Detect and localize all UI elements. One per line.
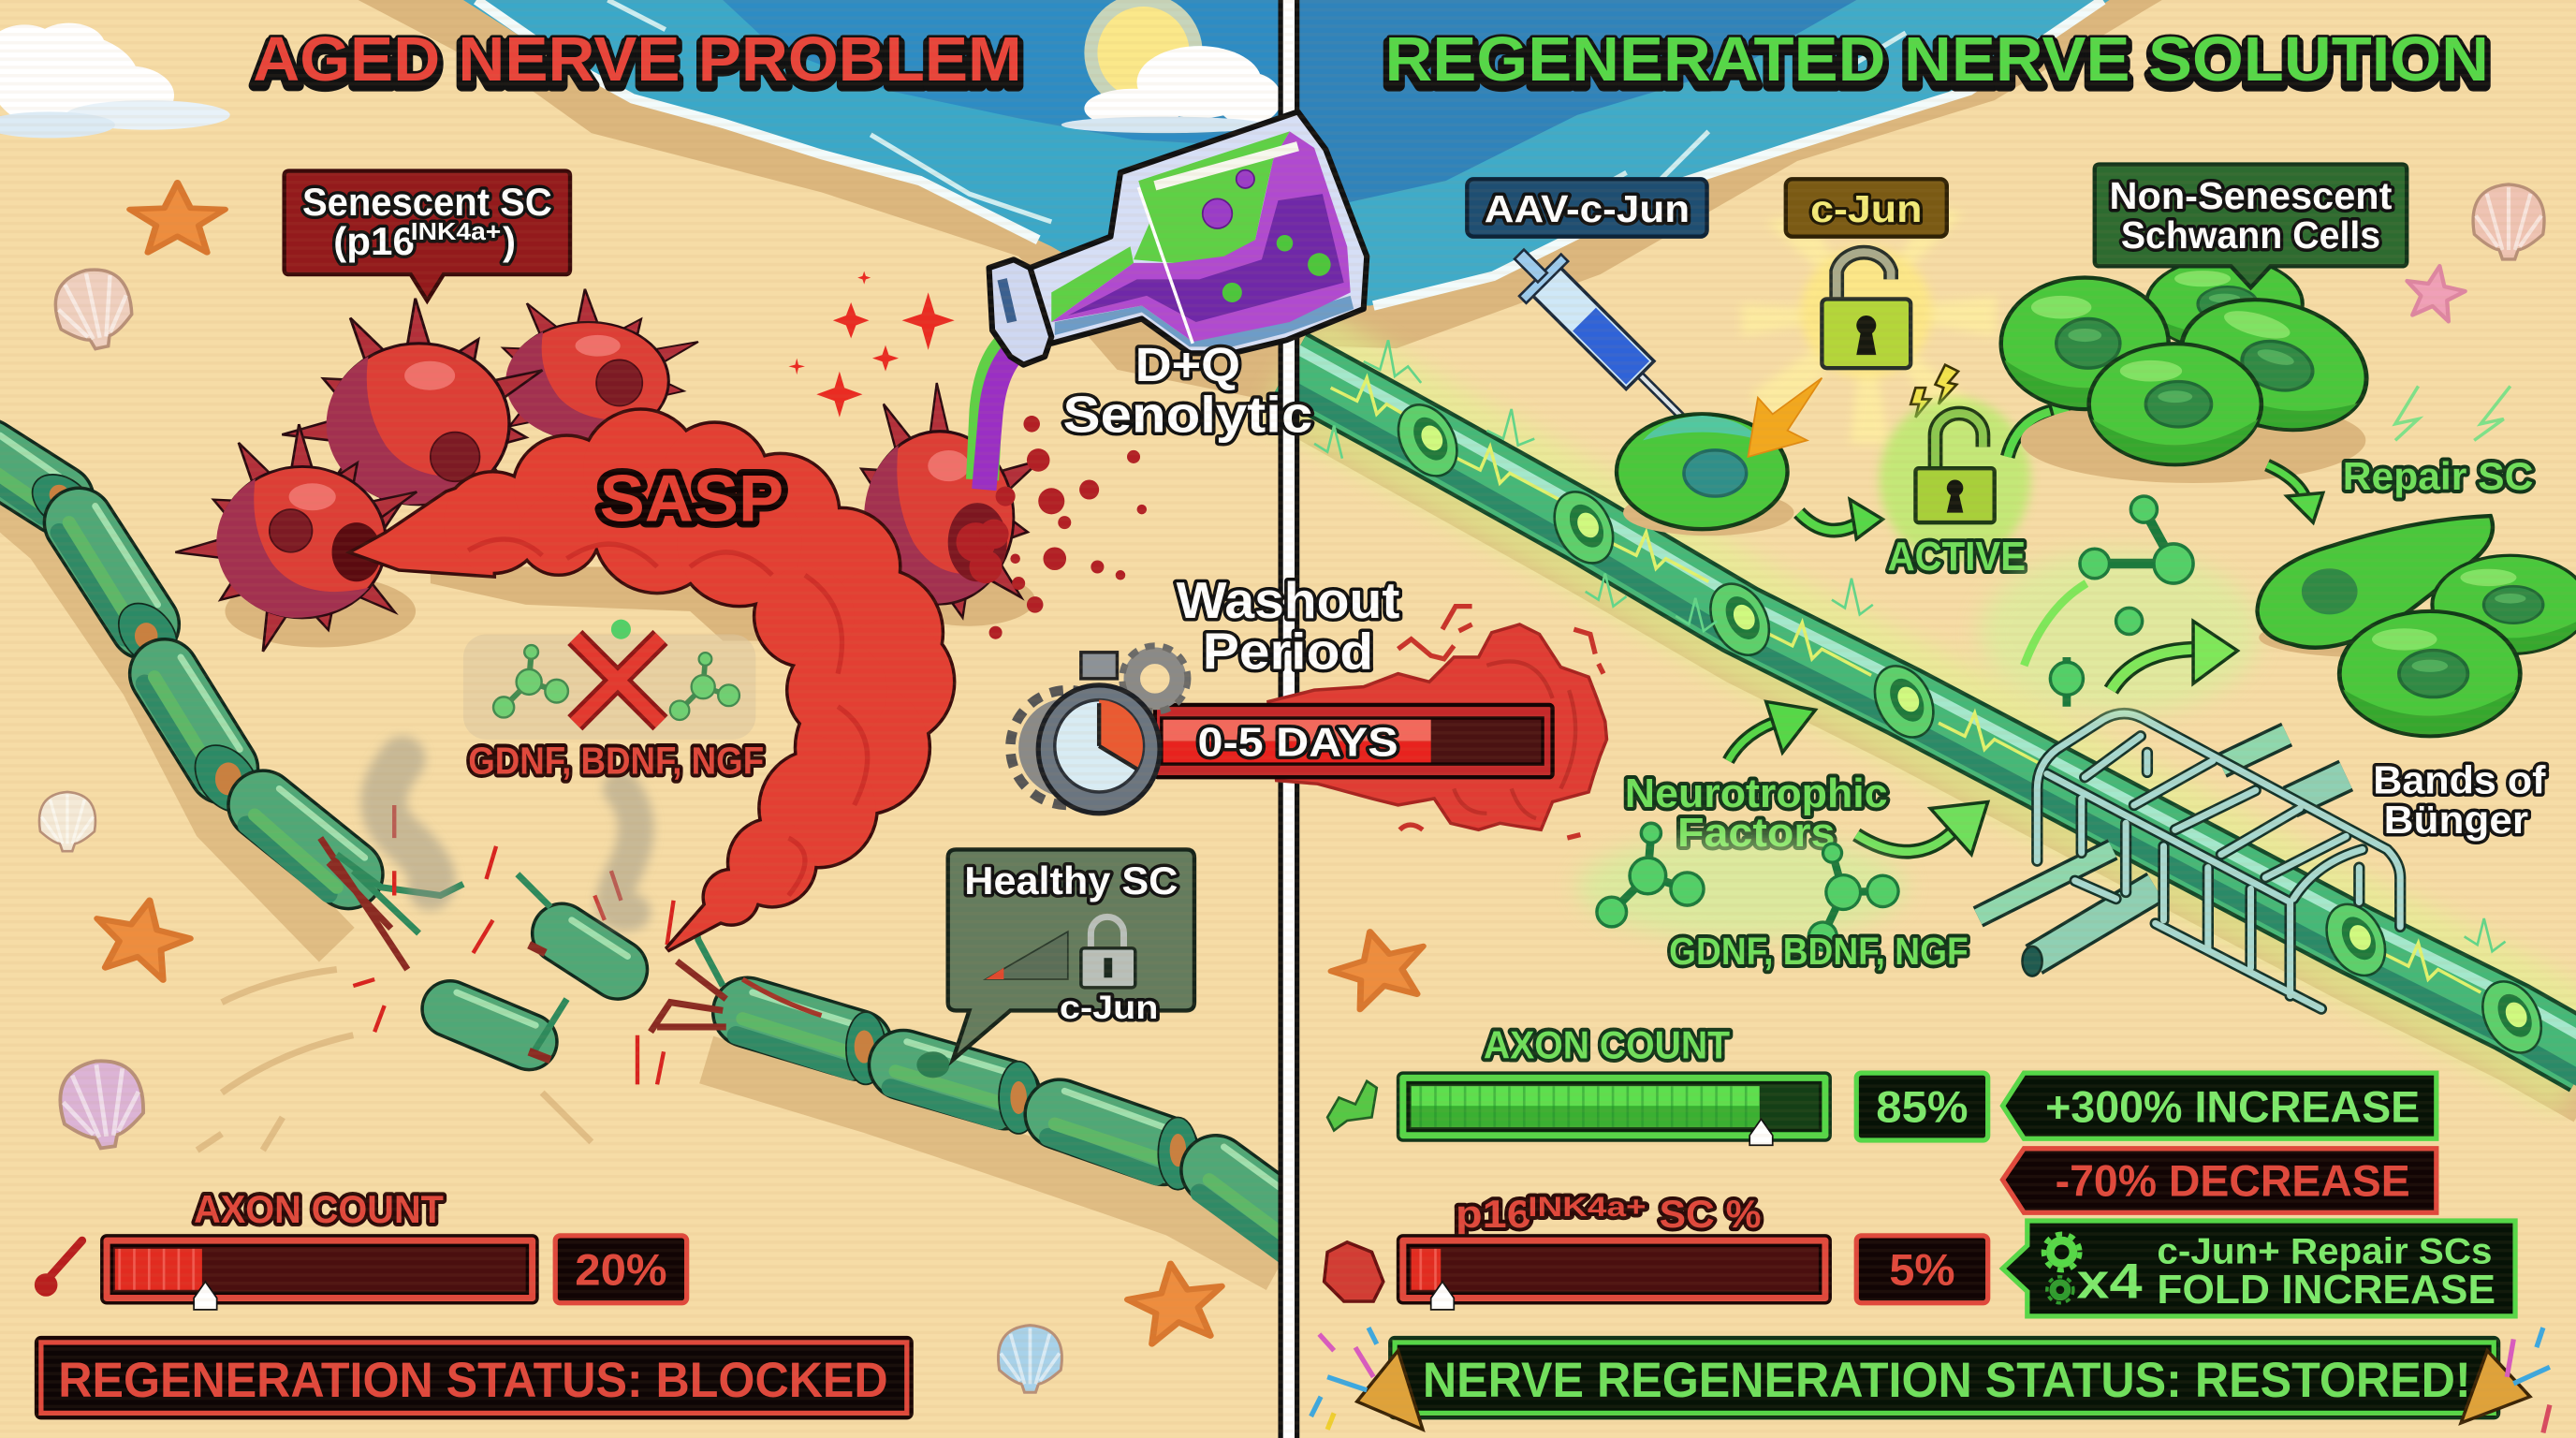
- line 2: Schwann Cells: [2121, 213, 2380, 257]
- arrow to cell cluster: [2008, 394, 2076, 457]
- x4 line 1: c-Jun+ Repair SCs: [2157, 1232, 2492, 1272]
- non-senescent label: [2095, 165, 2407, 287]
- fluid: [1573, 308, 1649, 385]
- shackle metal: [1837, 253, 1891, 299]
- Washout label: [1177, 572, 1399, 680]
- bar fill: [115, 1249, 202, 1290]
- starfish left bottom: [1123, 1257, 1228, 1346]
- bubble shape: [948, 849, 1194, 1060]
- stat 5%: 5%: [1889, 1245, 1955, 1295]
- senescent label: [285, 171, 570, 301]
- senescent cell top left: [281, 299, 548, 544]
- track: [1162, 718, 1543, 764]
- faint bolts: [2395, 386, 2510, 440]
- title left: AGED NERVE PROBLEM: [253, 30, 1022, 99]
- track: [1408, 1245, 1821, 1293]
- frame: [1398, 1236, 1830, 1303]
- nerve fragment middle: [518, 874, 627, 970]
- bar track: [111, 1245, 527, 1293]
- ACTIVE label: ACTIVE: [1888, 534, 2026, 580]
- p16 label: INK4a+: [1528, 1192, 1647, 1223]
- body: [1822, 299, 1910, 368]
- stat: axon count label left: AXON COUNT: [194, 1187, 444, 1231]
- stat -70%: -70% DECREASE: [2056, 1157, 2410, 1207]
- frame: [1398, 1073, 1830, 1140]
- curved motion arrow: [2024, 583, 2086, 666]
- barrel: [1530, 266, 1654, 389]
- Bands of Bunger cage: [2037, 713, 2400, 1009]
- status blocked: REGENERATION STATUS: BLOCKED: [58, 1353, 888, 1408]
- white curve: [1138, 187, 1193, 344]
- senescent cell lower left: [174, 424, 422, 654]
- stat 85%: 85%: [1876, 1083, 1969, 1133]
- nerve glow: [1290, 365, 2576, 1060]
- bubble: [285, 171, 570, 301]
- liquid purple dark: [1068, 194, 1344, 322]
- status restored: NERVE REGENERATION STATUS: RESTORED!: [1423, 1353, 2471, 1408]
- p16 label: [1456, 1192, 1761, 1236]
- bubbles: [1203, 170, 1254, 228]
- red X core: [575, 638, 661, 723]
- shackle: [1837, 253, 1891, 299]
- nerve node 5: [2315, 894, 2397, 986]
- bottle lip: [989, 259, 1051, 365]
- shell blue: [998, 1326, 1061, 1392]
- arrow to repair cells: [2111, 621, 2237, 690]
- senescent cell top middle: [465, 289, 703, 469]
- labels top right: [1467, 179, 1947, 237]
- cloud body: [353, 411, 953, 949]
- hand: [1099, 703, 1137, 769]
- molecule large: [2080, 496, 2193, 583]
- marker: [1431, 1282, 1454, 1310]
- faded molecules left: [493, 645, 568, 717]
- wave crest left: [607, 0, 1051, 222]
- cloud shading: [1454, 661, 1575, 818]
- nerve shadow right: [1290, 403, 2576, 1097]
- cloud body: [1268, 624, 1606, 829]
- small molecule center: [2050, 608, 2143, 707]
- D+Q label: Senolytic: [1063, 387, 1312, 444]
- D+Q label: D+Q: [1135, 338, 1240, 391]
- stat 20%: 20%: [575, 1245, 667, 1295]
- senescent cell shadows: [225, 574, 1035, 648]
- arrow to repair: [2267, 465, 2323, 522]
- label: Healthy SC: [964, 858, 1178, 902]
- Washout label: Washout: [1177, 572, 1399, 629]
- sand shadow under cloud: [431, 567, 822, 640]
- marker: [1749, 1119, 1773, 1145]
- SASP label: SASP: [600, 461, 783, 535]
- nerve node 4: [1863, 656, 1945, 747]
- stat 20%: [555, 1236, 687, 1303]
- molecule glow: [1577, 835, 1906, 940]
- cell left: [2001, 278, 2169, 409]
- title right: REGENERATED NERVE SOLUTION: [1385, 30, 2489, 99]
- nerve segment right D: [1199, 1147, 1314, 1265]
- cell body: [1617, 414, 1788, 529]
- electric sparks on nerve: [1314, 340, 2506, 951]
- c-Jun label: c-Jun: [1810, 187, 1922, 230]
- cloud shading: [468, 539, 868, 896]
- SASP red cloud: [353, 411, 953, 949]
- nerve ECG trace: [1331, 378, 2481, 992]
- elongated cell: [2258, 516, 2493, 648]
- poison cloud behind timer: [1268, 624, 1606, 829]
- flange: [1519, 255, 1568, 303]
- cloud outline: [353, 411, 953, 949]
- molecule left: [1597, 823, 1704, 927]
- nerve segment right B: [890, 1042, 1038, 1134]
- healthy SC bubble: [948, 849, 1194, 1060]
- glass: [1030, 111, 1367, 353]
- line 1: Non-Senescent: [2110, 174, 2392, 217]
- bar: axon count 20%: [102, 1236, 537, 1310]
- sun: [1084, 0, 1203, 111]
- x4: x4: [2076, 1255, 2143, 1310]
- fill: [1412, 1086, 1760, 1127]
- needle: [1629, 363, 1703, 438]
- stat 85%: [1856, 1073, 1988, 1140]
- sea left: [463, 0, 1278, 320]
- cloud left: [0, 23, 230, 138]
- label Bands of Bunger: Bands of: [2373, 758, 2547, 802]
- fill: [1412, 1249, 1441, 1290]
- nerve node 3: [1699, 574, 1780, 666]
- icon: broken axon: [35, 1240, 82, 1297]
- bar frame: [102, 1236, 537, 1303]
- cage bars: [2037, 713, 2400, 1009]
- box: [2002, 1221, 2515, 1316]
- nerve node 1: [1386, 395, 1469, 486]
- poison wisps: [1398, 607, 1603, 838]
- nerve segment 2: [59, 506, 189, 677]
- blood sparks: [353, 805, 674, 1084]
- x4 line 2: FOLD INCREASE: [2157, 1267, 2496, 1313]
- senolytic bottle: [983, 111, 1367, 490]
- nerve shadow: [0, 493, 1278, 1269]
- single green cell: [1617, 414, 1794, 536]
- bar: axon count 85%: [1398, 1073, 1830, 1145]
- syringe: [1499, 233, 1721, 457]
- starfish pink: [2401, 261, 2468, 323]
- gear left: [1010, 690, 1125, 805]
- cell front: [2089, 344, 2261, 464]
- starfish right: [1324, 919, 1435, 1014]
- torn axon strands left: [320, 838, 463, 970]
- c-Jun: c-Jun: [1060, 990, 1158, 1026]
- shell top right: [2473, 184, 2544, 259]
- bar text: 0-5 DAYS: [1197, 719, 1398, 765]
- sea right: [1298, 0, 2110, 305]
- green arrow to active: [1799, 500, 1882, 539]
- body active: [1915, 468, 1995, 522]
- nerve segment 1: [0, 435, 103, 539]
- Neurotrophic label: Factors: [1677, 810, 1835, 856]
- Neurotrophic label: [1625, 770, 1888, 856]
- red sparkles: [788, 271, 955, 418]
- gear big: [2043, 1234, 2080, 1270]
- senescent cell dying: [827, 383, 1046, 646]
- washout timer bar: [1155, 705, 1553, 777]
- GDNF label left: GDNF, BDNF, NGF: [468, 740, 764, 783]
- nerve underside: [1290, 388, 2576, 1083]
- sea right deep water: [1298, 0, 1856, 213]
- stat -70%: [2002, 1149, 2437, 1212]
- cloud right: [1061, 46, 1281, 133]
- D+Q label: [1063, 338, 1312, 444]
- smoke wisps: [384, 759, 636, 913]
- label line 2: (p16: [333, 219, 415, 263]
- green glow region: [1980, 550, 2259, 714]
- stopwatch: [1010, 646, 1188, 814]
- label Bands of Bunger: [2373, 758, 2547, 842]
- stream: [983, 337, 1025, 490]
- keyhole: [1856, 315, 1876, 355]
- frame: [1155, 705, 1553, 777]
- starfish left top: [130, 183, 225, 253]
- red X: [575, 638, 661, 723]
- red wedge: [1099, 700, 1143, 769]
- bubble: [2095, 165, 2407, 287]
- bottle opening: [1003, 279, 1012, 322]
- status blocked: [37, 1338, 912, 1418]
- non-senescent cell cluster: [2001, 258, 2381, 483]
- icon: senescent cell: [1325, 1242, 1383, 1301]
- orange arrow: [1748, 378, 1822, 457]
- label line 2: [333, 217, 516, 263]
- label line 2: INK4a+: [411, 217, 501, 245]
- crown: [1081, 653, 1117, 679]
- glass blue underside: [1055, 296, 1354, 346]
- shell purple: [55, 1055, 149, 1152]
- AAV label: [1467, 179, 1707, 237]
- ash scuffs on sand: [198, 970, 592, 1151]
- arrow up to nerve: [1728, 701, 1815, 761]
- title right: REGENERATED NERVE SOLUTION: [1385, 25, 2489, 95]
- nerve outline: [1290, 365, 2576, 1060]
- cell top tint: [1643, 416, 1761, 440]
- shell small: [39, 792, 95, 851]
- elongated shadow: [2259, 618, 2472, 657]
- lock active: [1915, 413, 1995, 522]
- stat +300%: +300% INCREASE: [2045, 1083, 2420, 1133]
- foam left: [476, 0, 1038, 240]
- white highlight bar: [1155, 146, 1298, 185]
- cell back: [2146, 258, 2303, 350]
- stat +300%: [2002, 1073, 2437, 1138]
- molecule right: [1780, 827, 1910, 954]
- marker: [194, 1282, 217, 1310]
- cage outline: [2037, 713, 2400, 1009]
- party popper left: [1311, 1328, 1423, 1430]
- panel: regenerated nerve: [1290, 25, 2576, 1432]
- nerve segment 3: [144, 657, 271, 825]
- nucleus: [1684, 450, 1747, 496]
- missing neurotrophic factors: [463, 620, 755, 740]
- signal bars: [986, 932, 1068, 979]
- lightning bolts: [1910, 365, 1958, 418]
- plunger: [1515, 250, 1547, 282]
- starfish left middle: [87, 890, 197, 984]
- p16 label: p16: [1456, 1192, 1531, 1236]
- panel: aged nerve: [0, 25, 1314, 1418]
- red fill: [1164, 720, 1431, 762]
- wet sand band right: [1298, 0, 2162, 348]
- liquid purple: [1051, 131, 1351, 342]
- gear back: [1122, 646, 1188, 712]
- arrow to nerve: [1856, 801, 1988, 855]
- nerve node 2: [1543, 482, 1625, 573]
- nerve fragment lower: [450, 992, 567, 1060]
- stat 5%: [1856, 1236, 1988, 1303]
- label Bands of Bunger: Bünger: [2384, 798, 2528, 842]
- repair cell lower: [2339, 611, 2520, 736]
- GDNF label right: GDNF, BDNF, NGF: [1669, 930, 1969, 973]
- party popper right: [2461, 1328, 2550, 1432]
- lock: [1081, 917, 1135, 988]
- label line 2: ): [503, 219, 516, 263]
- yellow glow rays: [1741, 205, 1996, 444]
- bubbles green: [1222, 235, 1331, 302]
- shackle active metal: [1936, 413, 1983, 468]
- nerve highlight: [1290, 345, 2576, 1040]
- gear small: [2047, 1277, 2073, 1303]
- repair SC elongated: [2258, 516, 2493, 657]
- keyhole active: [1947, 479, 1963, 513]
- p16 label: SC %: [1660, 1192, 1761, 1236]
- status restored: [1390, 1338, 2499, 1418]
- nerve segment right A: [736, 979, 886, 1084]
- stat x4: [2002, 1221, 2515, 1316]
- dim patch: [463, 634, 755, 740]
- case: [1038, 685, 1160, 814]
- center divider: [1278, 0, 1299, 1438]
- nerve segment 4 torn: [246, 788, 365, 894]
- lock open yellow: [1822, 253, 1910, 368]
- exploding cell debris: [956, 416, 1147, 639]
- axon count label right: AXON COUNT: [1484, 1022, 1730, 1066]
- liquid green: [1134, 131, 1290, 263]
- nerve segment right C: [1048, 1091, 1197, 1190]
- Neurotrophic label: Neurotrophic: [1625, 770, 1888, 816]
- sea left deep water: [723, 0, 1278, 148]
- Repair SC label: Repair SC: [2343, 454, 2533, 498]
- c-Jun label: [1786, 179, 1947, 237]
- torn strands right: [651, 917, 726, 1032]
- nerve body: [1290, 365, 2576, 1060]
- face: [1055, 700, 1144, 792]
- cell shadow: [1623, 490, 1794, 536]
- cluster shadow: [2021, 398, 2365, 483]
- Washout label: Period: [1203, 623, 1373, 680]
- elongated nucleus: [2302, 568, 2358, 614]
- Bands of Bunger tubes: [1978, 735, 2346, 976]
- nerve node 6: [2471, 972, 2553, 1063]
- bar: p16 5%: [1398, 1236, 1830, 1310]
- icon: axon sprout: [1327, 1081, 1377, 1131]
- faded molecule top: [611, 620, 631, 639]
- track: [1408, 1083, 1821, 1131]
- title left: AGED NERVE PROBLEM: [253, 25, 1022, 95]
- label line 1: Senescent SC: [302, 180, 552, 224]
- wave crest right: [1553, 33, 1906, 213]
- foam right: [1373, 0, 2103, 305]
- shackle active: [1936, 413, 1983, 468]
- faded molecules right: [670, 653, 739, 720]
- wet sand band left: [359, 0, 1278, 403]
- active lock glow: [1880, 398, 2030, 562]
- shell top left: [49, 262, 139, 355]
- AAV label: AAV-c-Jun: [1485, 187, 1690, 230]
- cell right: [2166, 280, 2381, 449]
- liquid green neck: [1051, 246, 1134, 322]
- repair cell right: [2432, 555, 2576, 654]
